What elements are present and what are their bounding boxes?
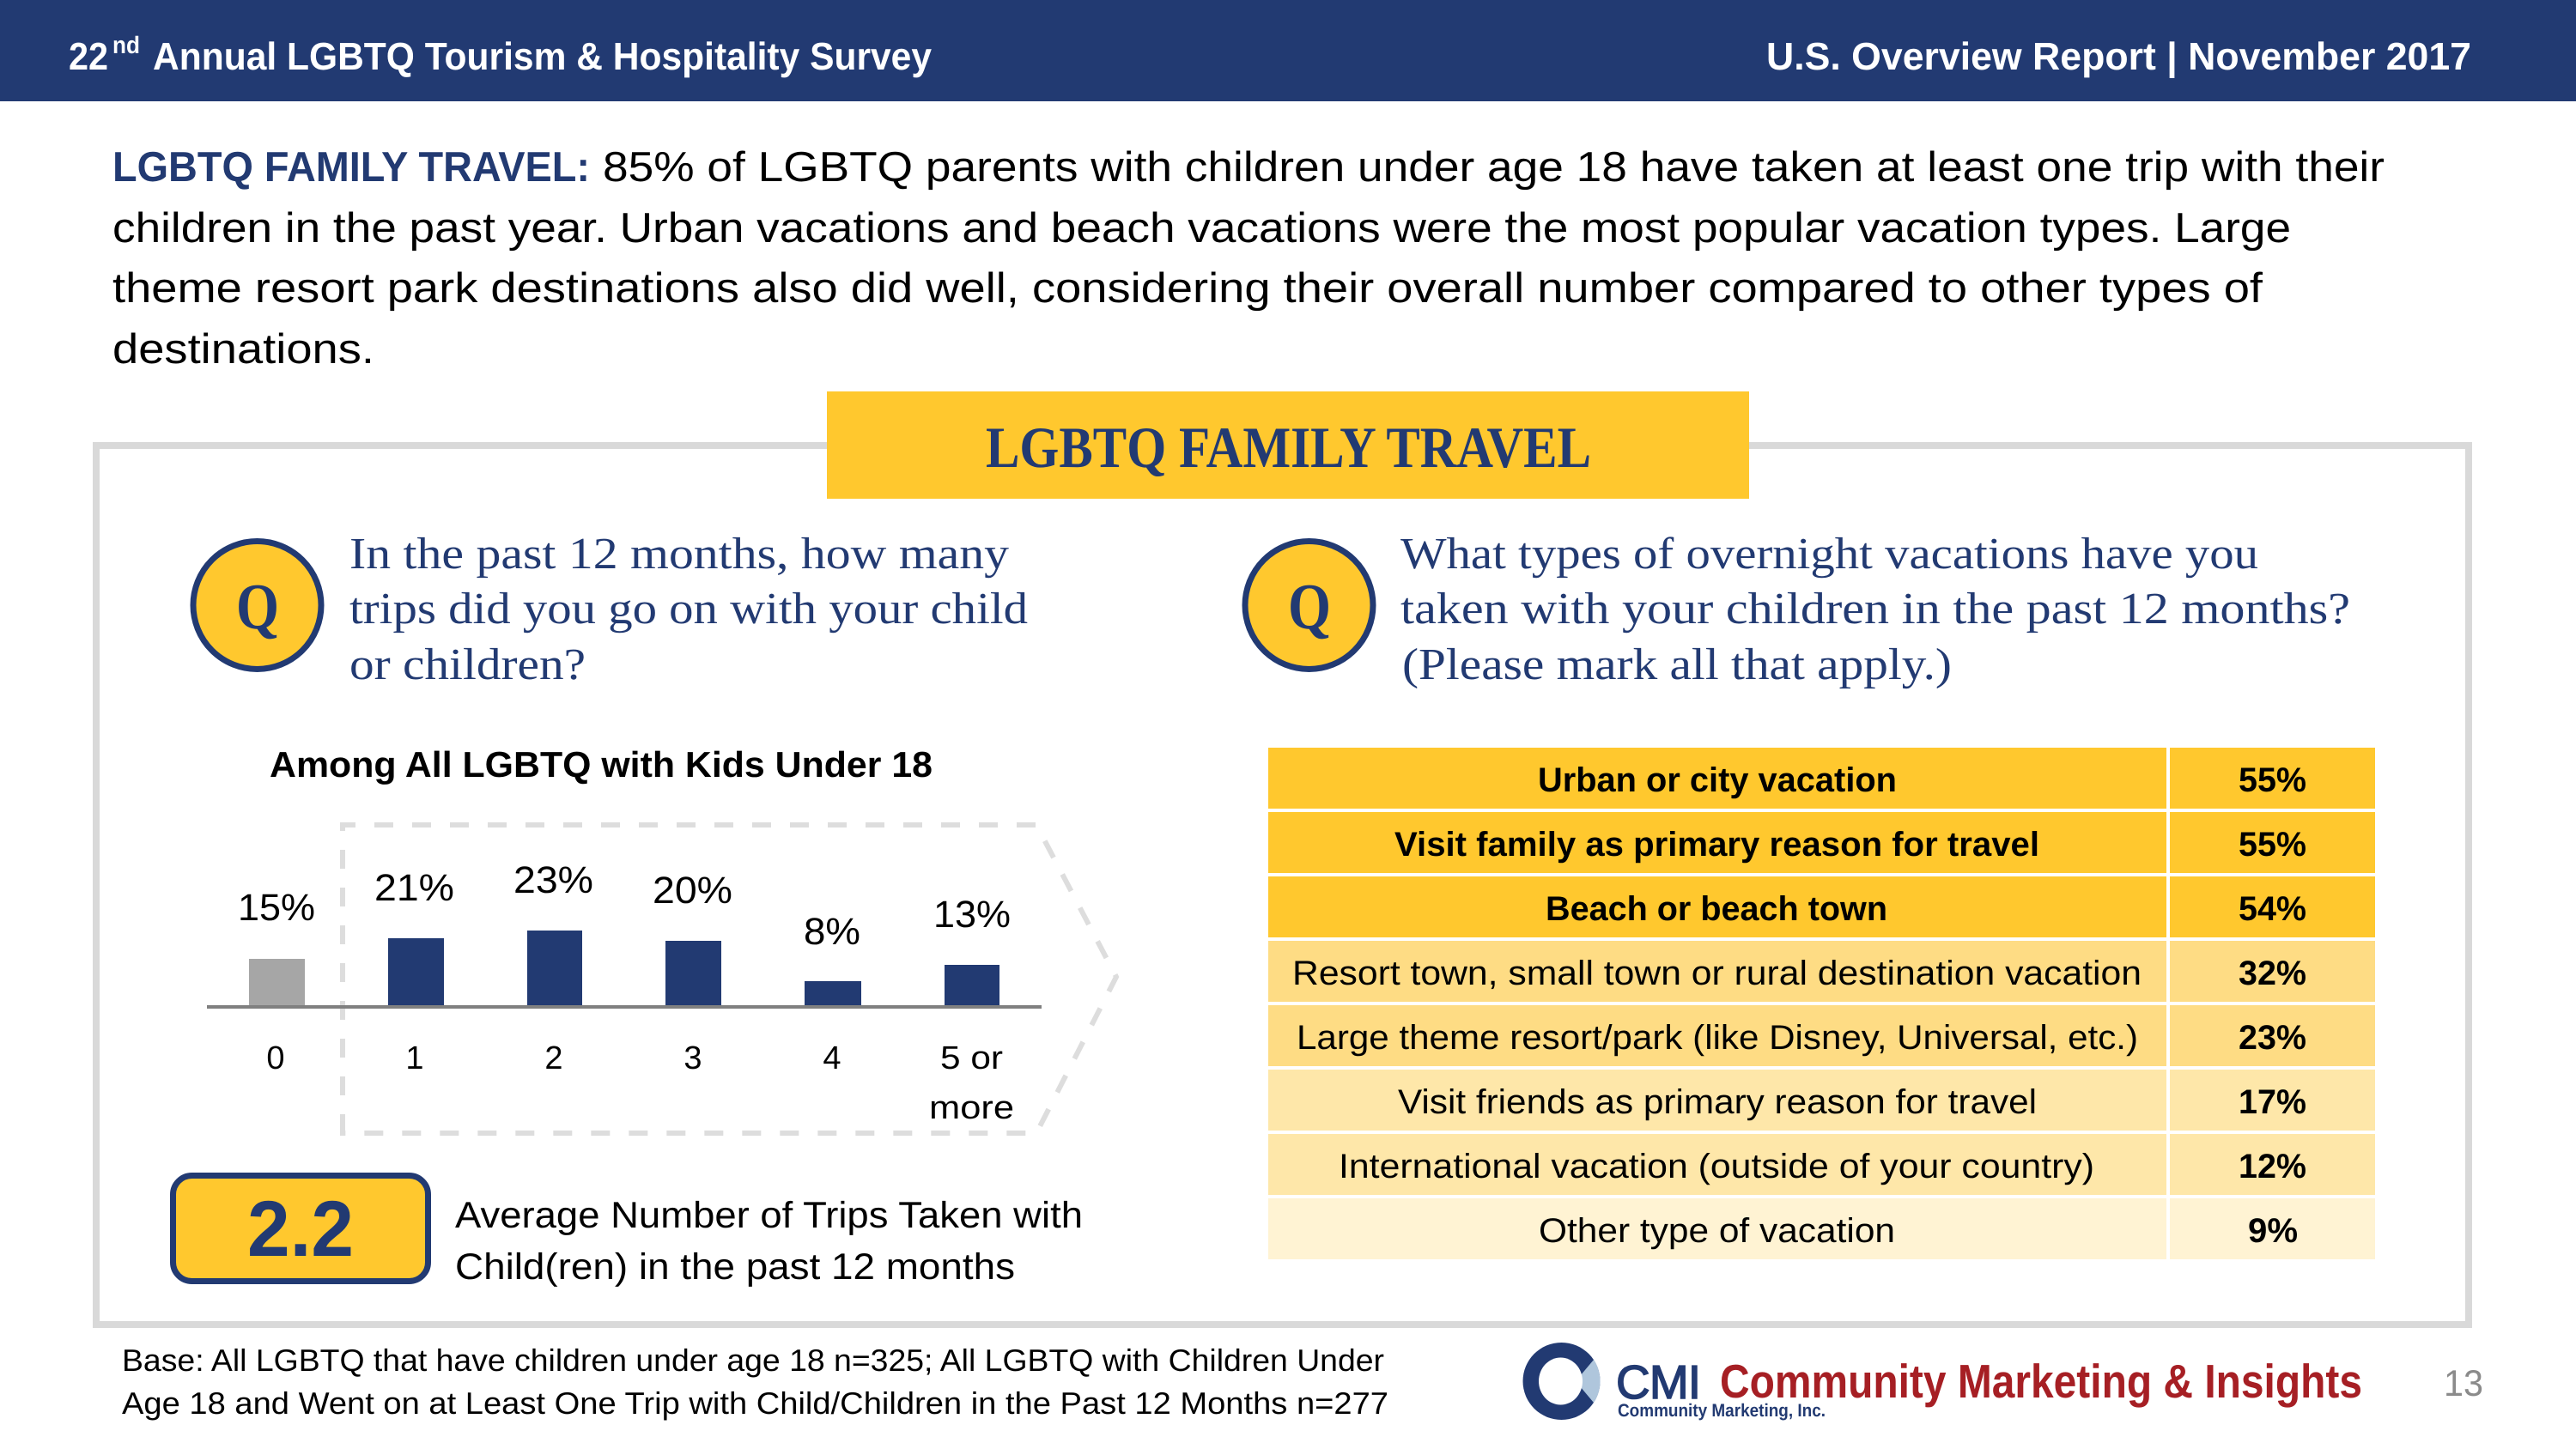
row 2: Visit family as primary reason for travel — [1394, 826, 2039, 864]
question: vacation types: taken with your children in the past 12 months? — [1400, 585, 2350, 634]
row 3: Beach or beach town — [1546, 890, 1887, 928]
row 8 — [1268, 1198, 2375, 1259]
axis labels: 3 — [683, 1040, 702, 1076]
row 2: 55% — [2239, 826, 2306, 864]
value labels: 15% — [238, 887, 315, 929]
icon: Q badge left — [193, 541, 321, 670]
row 7: International vacation (outside of your country) — [1339, 1148, 2094, 1185]
value labels: 23% — [513, 859, 593, 901]
average callout value — [173, 1176, 428, 1281]
question: trips with children: or children? — [349, 640, 586, 689]
row 3 — [1268, 876, 2375, 937]
row 1 — [1268, 748, 2375, 809]
intro paragraph: destinations. — [112, 326, 374, 373]
icon: Q badge left: Q — [236, 571, 279, 643]
page number: 13 — [2444, 1363, 2483, 1404]
row 2 — [1268, 812, 2375, 873]
row 1: Urban or city vacation — [1538, 761, 1897, 799]
row 4: Resort town, small town or rural destination vacation — [1292, 955, 2142, 992]
base footnote: Age 18 and Went on at Least One Trip with Child/Children in the Past 12 Months n=277 — [122, 1385, 1388, 1421]
axis labels: 5 or — [940, 1040, 1003, 1076]
value labels: 20% — [653, 870, 732, 912]
chart heading: Among All LGBTQ with Kids Under 18 — [270, 744, 933, 785]
value labels: 21% — [374, 867, 454, 909]
row 5 — [1268, 1005, 2375, 1066]
icon: Q badge right: Q — [1288, 571, 1331, 643]
row 6: 17% — [2239, 1083, 2306, 1121]
average callout text: Child(ren) in the past 12 months — [455, 1246, 1015, 1288]
row 6 — [1268, 1070, 2375, 1131]
axis labels: 2 — [544, 1040, 563, 1076]
row 8: Other type of vacation — [1539, 1212, 1895, 1250]
question: vacation types: (Please mark all that apply.) — [1402, 640, 1952, 689]
row 7: 12% — [2239, 1148, 2306, 1185]
header title: Annual LGBTQ Tourism & Hospitality Survey — [153, 34, 932, 78]
value labels: 8% — [804, 911, 860, 953]
average callout text — [455, 1195, 1083, 1288]
row 6: Visit friends as primary reason for travel — [1398, 1083, 2037, 1121]
row 3: 54% — [2239, 890, 2306, 928]
panel title banner: LGBTQ FAMILY TRAVEL — [986, 415, 1591, 480]
intro paragraph: children in the past year. Urban vacations and beach vacations were the most popular vacation types. Large — [112, 205, 2291, 252]
logo: CMI: CMI — [1616, 1355, 1701, 1409]
logo: CMI — [1523, 1343, 2362, 1421]
header report date: U.S. Overview Report | November 2017 — [1766, 34, 2471, 78]
icon: Q badge right — [1245, 541, 1373, 670]
intro paragraph: theme resort park destinations also did well, considering their overall number compared to other types of — [112, 265, 2263, 312]
header title: nd — [112, 32, 140, 58]
question: trips with children: In the past 12 months, how many — [349, 530, 1009, 579]
panel frame — [96, 446, 2469, 1325]
intro paragraph — [112, 144, 2385, 373]
question: trips with children: trips did you go on with your child — [349, 585, 1028, 634]
value labels — [238, 859, 1011, 953]
average callout text: Average Number of Trips Taken with — [455, 1195, 1083, 1236]
base footnote — [122, 1343, 1388, 1421]
axis labels: more — [929, 1090, 1014, 1126]
question: vacation types: What types of overnight vacations have you — [1400, 530, 2258, 579]
bar chart: trips taken — [207, 859, 1042, 1126]
icon: logo ring — [1523, 1343, 1601, 1420]
row 4: 32% — [2239, 955, 2306, 992]
table: vacation types — [1268, 748, 2375, 1259]
header title: 22 — [69, 34, 108, 78]
average callout value: 2.2 — [247, 1185, 354, 1273]
axis labels: 0 — [266, 1040, 285, 1076]
row 1: 55% — [2239, 761, 2306, 799]
axis labels: 4 — [823, 1040, 841, 1076]
intro paragraph: 85% of LGBTQ parents with children under age 18 have taken at least one trip with their — [603, 144, 2385, 191]
panel title banner — [827, 391, 1749, 499]
row 7 — [1268, 1134, 2375, 1195]
base footnote: Base: All LGBTQ that have children under age 18 n=325; All LGBTQ with Children Under — [122, 1343, 1384, 1378]
header bar — [0, 0, 2576, 101]
dashed arrow: one or more trips — [343, 825, 1116, 1133]
row 4 — [1268, 941, 2375, 1002]
row 8: 9% — [2248, 1212, 2298, 1250]
question: trips with children — [349, 530, 1028, 689]
axis labels: 1 — [405, 1040, 424, 1076]
axis labels — [266, 1040, 1014, 1126]
value labels: 13% — [933, 894, 1011, 936]
row 5: Large theme resort/park (like Disney, Universal, etc.) — [1297, 1019, 2138, 1057]
intro paragraph: LGBTQ FAMILY TRAVEL: — [112, 144, 590, 191]
logo: CMI: Community Marketing, Inc. — [1618, 1401, 1826, 1421]
logo: CMI: Community Marketing & Insights — [1720, 1355, 2362, 1408]
question: vacation types — [1400, 530, 2350, 689]
row 5: 23% — [2239, 1019, 2306, 1057]
